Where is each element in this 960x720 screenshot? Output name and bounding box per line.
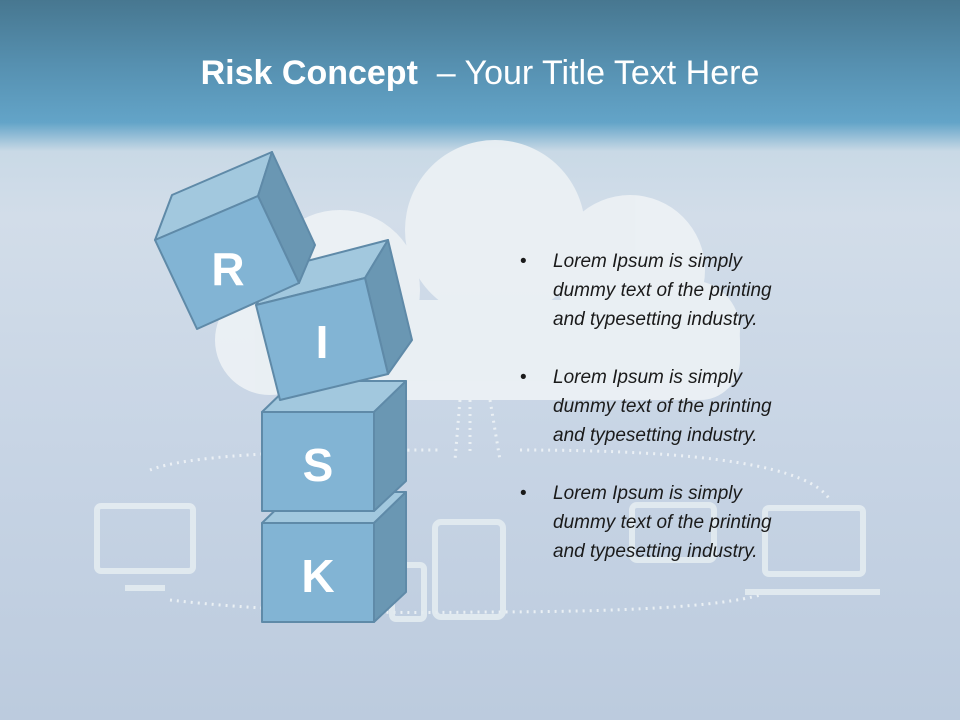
cube R xyxy=(155,152,315,329)
cube K xyxy=(262,492,406,622)
bullet 3: and typesetting industry. xyxy=(553,541,758,562)
bullet 2: Lorem Ipsum is simply xyxy=(553,367,742,388)
bullet 2: dummy text of the printing xyxy=(553,396,772,417)
bullet 1: dummy text of the printing xyxy=(553,280,772,301)
bullet 1: and typesetting industry. xyxy=(553,309,758,330)
bullet 2 xyxy=(520,363,860,450)
bullet text block xyxy=(520,251,772,562)
cube K: K xyxy=(301,550,335,602)
cube I xyxy=(256,240,412,400)
cube S xyxy=(262,381,406,511)
bullet 1 xyxy=(520,247,860,334)
title: Risk Concept – Your Title Text Here xyxy=(201,54,759,92)
bullet 1: Lorem Ipsum is simply xyxy=(553,251,742,272)
cube R: R xyxy=(211,243,245,295)
bullet 2: and typesetting industry. xyxy=(553,425,758,446)
bullet 3 xyxy=(520,479,860,566)
bullet 3: dummy text of the printing xyxy=(553,512,772,533)
cube I: I xyxy=(316,316,328,368)
bullet 3: Lorem Ipsum is simply xyxy=(553,483,742,504)
cube S: S xyxy=(303,439,333,491)
